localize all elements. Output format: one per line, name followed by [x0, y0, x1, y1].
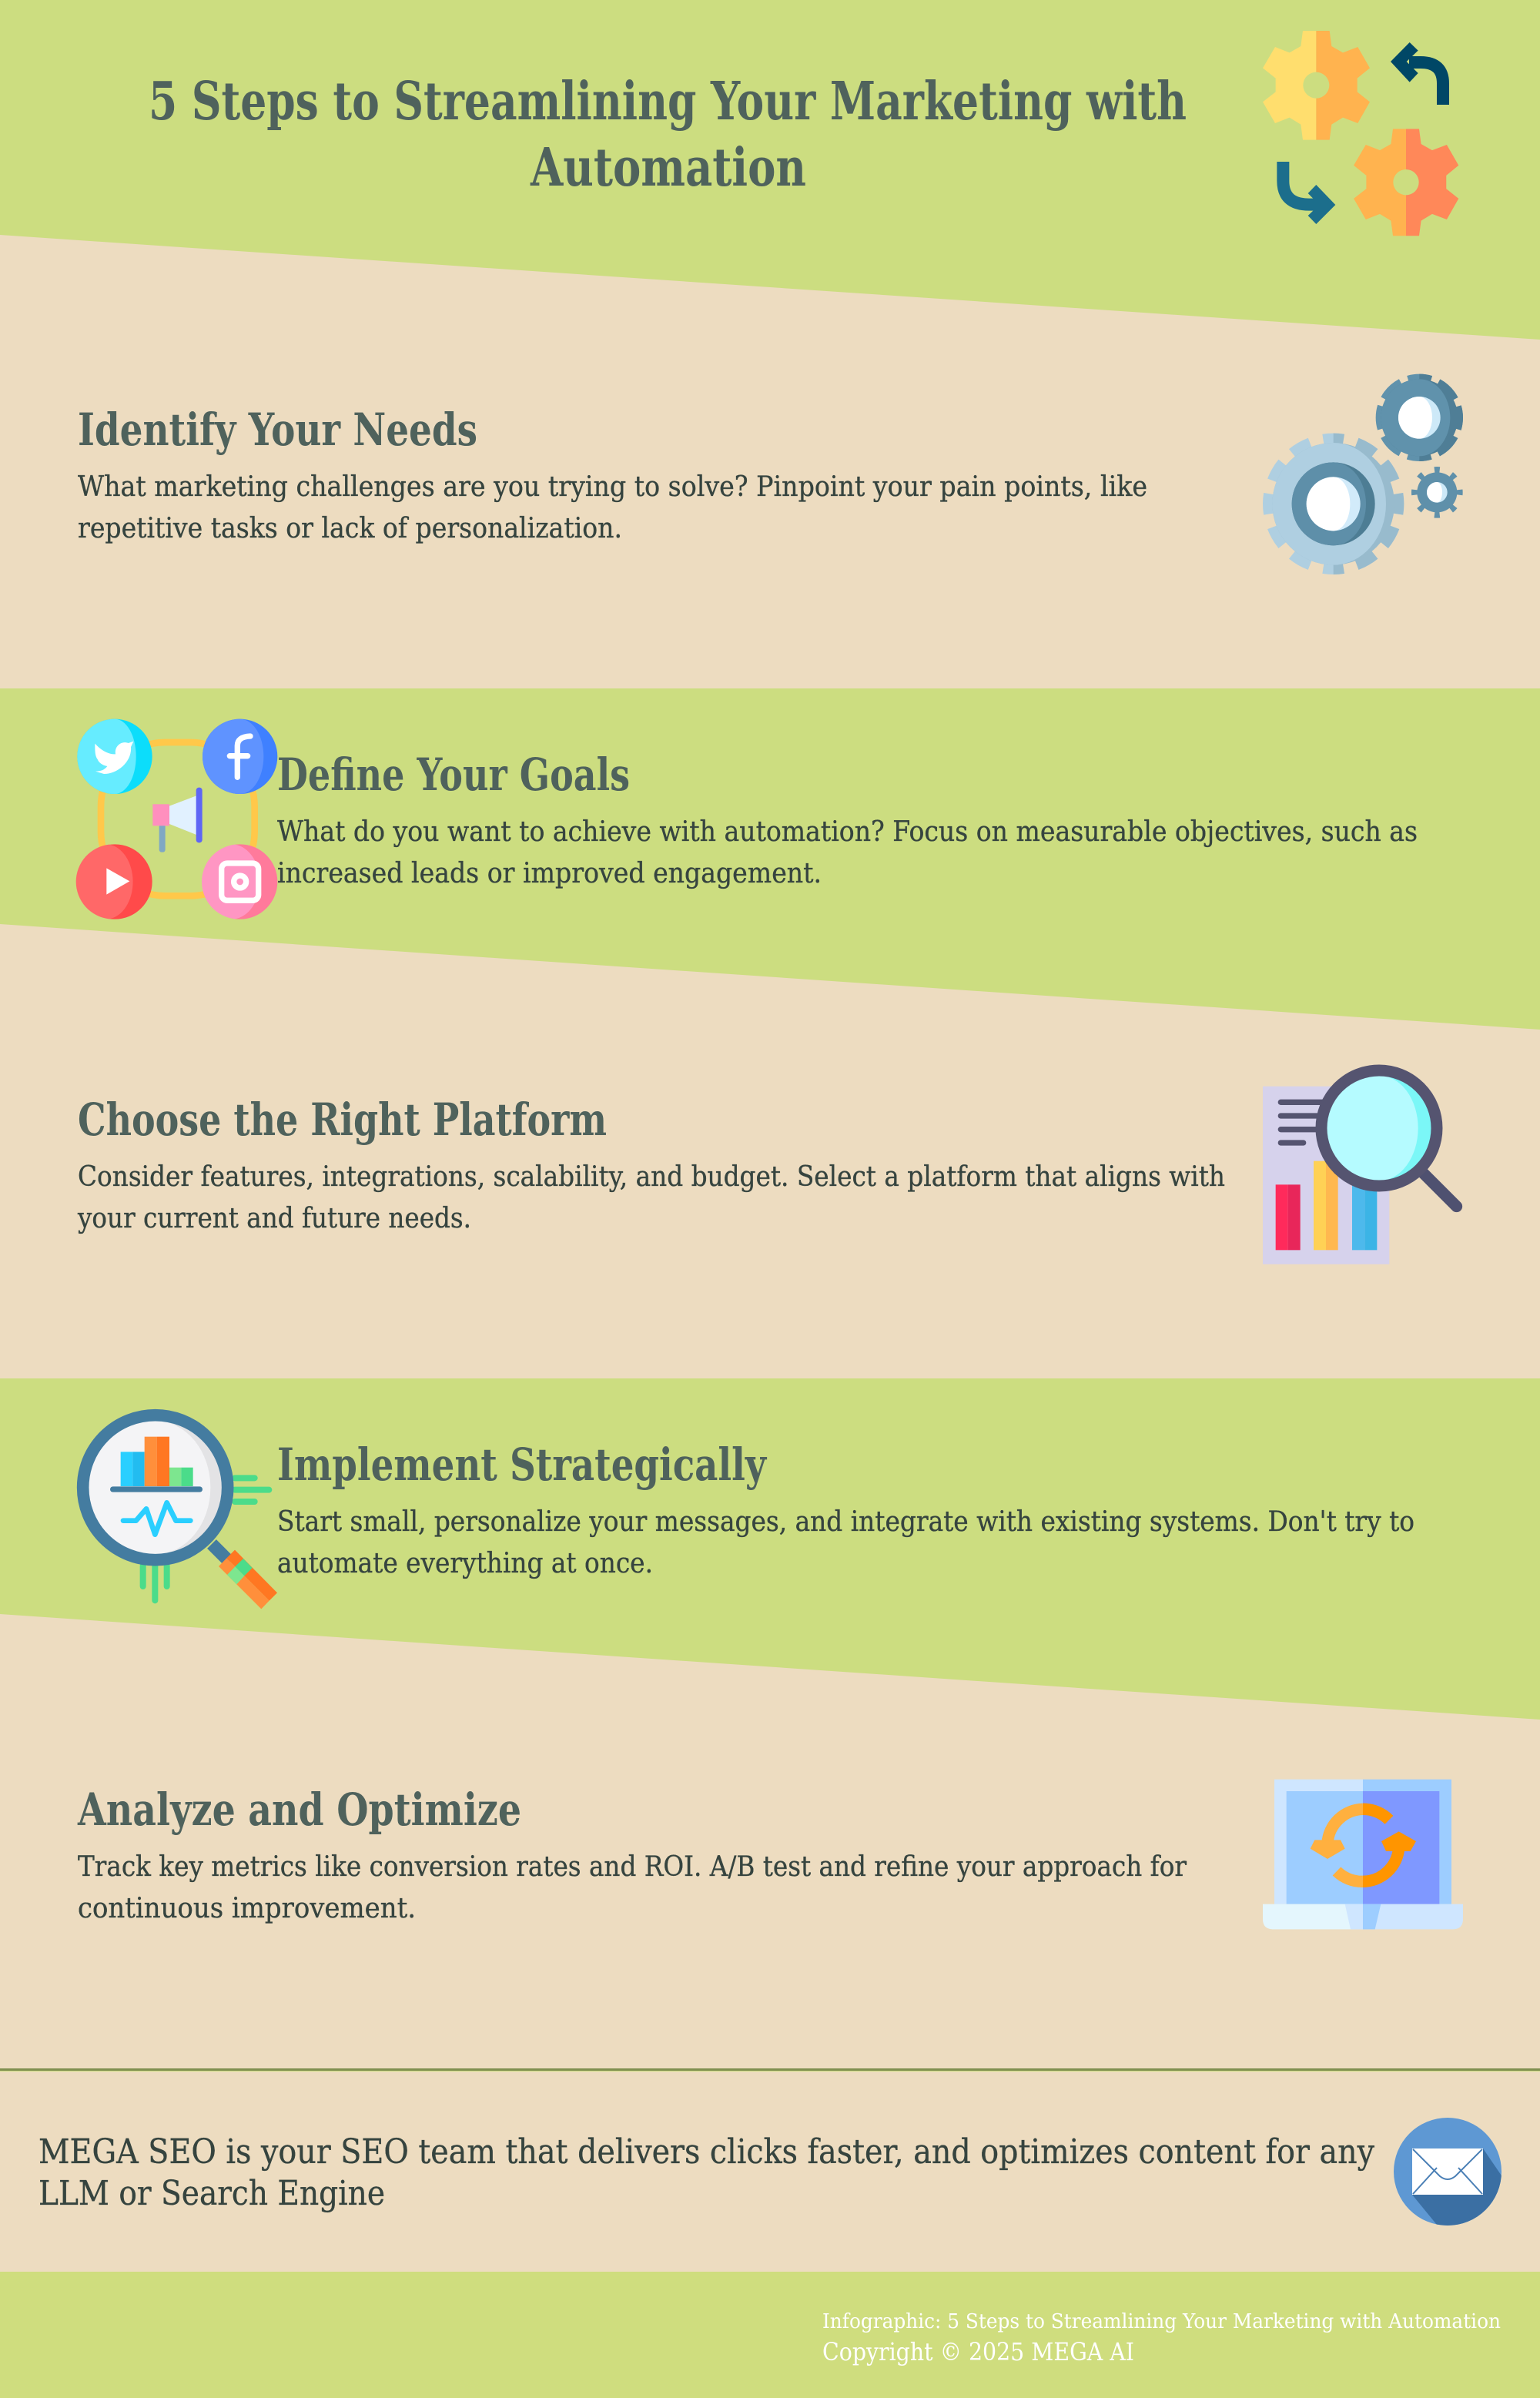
- heading: Implement Strategically: [277, 1438, 768, 1491]
- body text: continuous improvement.: [78, 1893, 416, 1924]
- panel: step 4 band: [0, 1378, 1540, 1720]
- icon: email: [1394, 2118, 1502, 2226]
- body text: [277, 816, 1418, 889]
- panel: step 2 text: [277, 749, 1418, 889]
- heading: Identify Your Needs: [78, 404, 477, 456]
- panel: step 2 band: [0, 688, 1540, 1030]
- panel: step 1 text: [78, 404, 1147, 544]
- footer caption: Infographic: 5 Steps to Streamlining Your Marketing with Automation: [822, 2310, 1501, 2333]
- icon: youtube: [76, 844, 152, 919]
- icon: laptop with refresh arrows: [1263, 1780, 1463, 1929]
- icon: report and magnifier: [1263, 1070, 1457, 1264]
- body text: automate everything at once.: [277, 1548, 653, 1579]
- icon: megaphone: [152, 788, 203, 852]
- body text: increased leads or improved engagement.: [277, 858, 822, 889]
- panel: header band: [0, 0, 1540, 340]
- divider line: [0, 2068, 1540, 2071]
- body text: your current and future needs.: [77, 1203, 471, 1234]
- panel: step 3 text: [77, 1094, 1225, 1234]
- body text: Consider features, integrations, scalability, and budget. Select a platform that aligns with: [78, 1161, 1225, 1193]
- icon: gears and arrows: [1263, 31, 1458, 236]
- panel: MEGA SEO promo text: MEGA SEO is your SEO team that delivers clicks faster, and optimizes content for any: [38, 2132, 1374, 2172]
- heading: Analyze and Optimize: [77, 1783, 521, 1836]
- body text: Start small, personalize your messages, and integrate with existing systems. Don't try to: [277, 1506, 1414, 1538]
- icon: blue gears: [1270, 379, 1460, 567]
- body text: What do you want to achieve with automation? Focus on measurable objectives, such as: [277, 816, 1418, 848]
- body text: [78, 1851, 1187, 1924]
- icon: instagram: [202, 844, 277, 919]
- body text: What marketing challenges are you trying to solve? Pinpoint your pain points, like: [78, 471, 1147, 503]
- panel: MEGA SEO promo text: LLM or Search Engine: [38, 2174, 385, 2213]
- panel: step 4 text: [277, 1438, 1414, 1579]
- icon: facebook: [203, 719, 277, 794]
- body text: [77, 1161, 1225, 1234]
- body text: Track key metrics like conversion rates and ROI. A/B test and refine your approach for: [78, 1851, 1187, 1883]
- copyright: Copyright © 2025 MEGA AI: [822, 2337, 1134, 2366]
- panel: step 5 text: [77, 1783, 1187, 1924]
- body text: [277, 1506, 1414, 1579]
- icon: social media ring: [76, 719, 277, 919]
- icon: analytics magnifier: [83, 1415, 277, 1609]
- icon: twitter: [77, 719, 152, 794]
- body text: [78, 471, 1147, 544]
- body text: repetitive tasks or lack of personalization.: [78, 513, 622, 544]
- title: [149, 71, 1187, 199]
- title: 5 Steps to Streamlining Your Marketing with: [149, 71, 1187, 132]
- panel: footer: [0, 2272, 1540, 2398]
- heading: Choose the Right Platform: [78, 1094, 607, 1146]
- heading: Define Your Goals: [277, 749, 630, 801]
- title: Automation: [530, 137, 806, 199]
- panel: MEGA SEO promo text: [38, 2132, 1374, 2213]
